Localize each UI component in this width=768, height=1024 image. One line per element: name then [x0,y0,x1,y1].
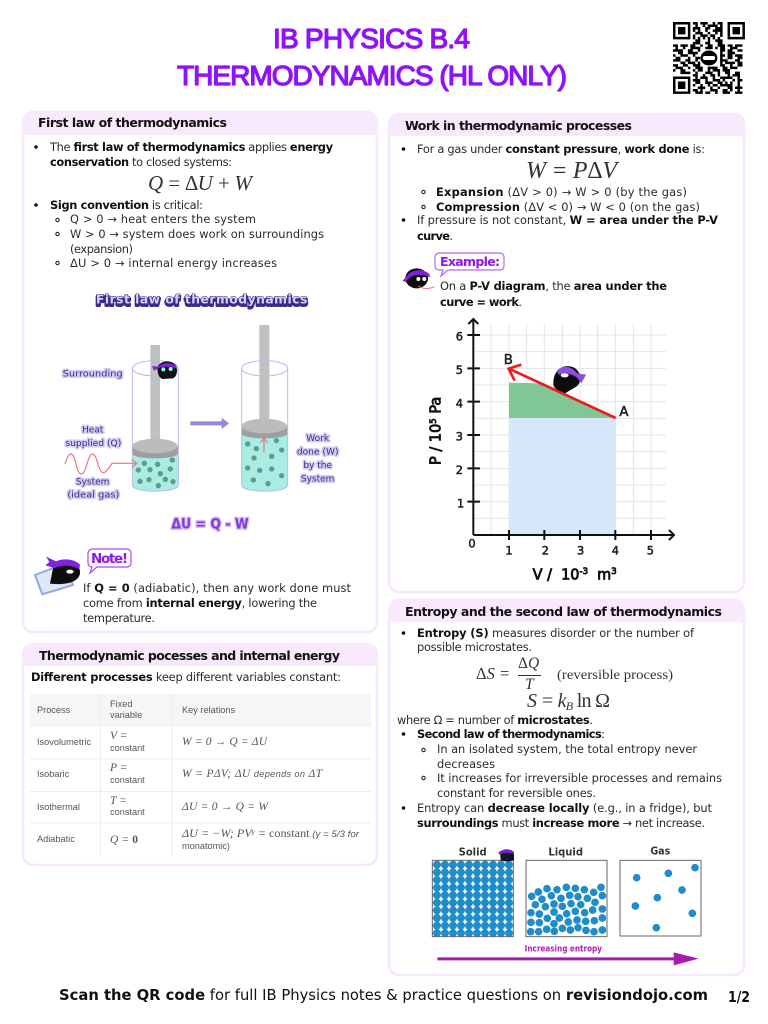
table: processes: Key relations [182,705,236,715]
text block: second law: constant for reversible ones. [437,786,596,800]
text block: first law definition: conservation to closed systems: [50,155,232,169]
row: isovolumetric: W = 0 → Q = ΔU [182,736,268,748]
text block: sign convention: ΔU > 0 → internal energy increases [70,256,277,270]
equation: entropy change: ΔS = [476,664,510,683]
row: isothermal [37,795,269,817]
x axis numbers: 3 [577,544,584,558]
label: surrounding: Surrounding [63,370,123,380]
text block: second law: where Ω = number of microstates. [397,713,593,727]
row: isovolumetric: Isovolumetric [37,737,92,747]
label: system: System [76,477,109,487]
panel heading: work [388,114,745,136]
icon: ninja with tablet [35,557,80,594]
panel heading: work: Work in thermodynamic processes [405,118,632,133]
title [177,23,567,91]
text block: second law: In an isolated system, the total entropy never [437,742,697,756]
text block: different processes: Different processes keep different variables constant: [31,670,341,684]
row: adiabatic: Q = 0 [110,834,138,846]
equation: Boltzmann entropy: S = k [527,690,567,712]
liquid box: Liquid [548,845,583,858]
x axis numbers [505,544,654,558]
row: isothermal: T = [110,795,127,807]
row: adiabatic: = [255,828,269,840]
panel: thermodynamic processes [22,644,378,865]
y axis numbers [456,330,476,551]
equation: entropy change: T [525,676,535,693]
point labels: A [619,405,629,420]
label: increasing entropy: Increasing entropy [525,945,602,955]
table: processes [30,694,371,855]
point labels: B [504,353,513,368]
x axis label: m [588,566,611,583]
text block: example: curve = work. [440,295,522,309]
text block: note: If Q = 0 (adiabatic), then any work done must [83,581,352,595]
row: adiabatic: ΔU = −W; PV [182,828,248,840]
row: adiabatic: constant (γ = 5/3 for [269,828,356,840]
table: processes: Fixed [110,699,132,709]
callout: note tag [88,549,131,573]
title: IB PHYSICS B.4 [273,23,470,54]
row: isobaric [37,762,324,785]
icon: ninja mascot on cylinder [152,361,177,379]
table: processes: variable [110,710,142,720]
text block: constant pressure: For a gas under constant pressure, work done is: [417,142,705,156]
x axis numbers: 1 [505,544,513,558]
row: isovolumetric [37,730,268,753]
label: work done [297,434,338,485]
icon: ninja on box [498,849,514,861]
arrow: increasing entropy [437,952,699,965]
y axis numbers: 2 [456,463,463,477]
line: A to B arrow [509,365,616,418]
icon: QR code [673,23,744,93]
right cylinder [242,325,288,491]
y axis numbers: 4 [456,396,463,410]
text block: second law: decreases [437,757,495,771]
callout: example tag: Example: [440,254,500,269]
callout: note tag: Note! [91,551,128,567]
row: adiabatic: monatomic) [182,841,230,851]
text block: expansion and compression: curve. [417,229,453,243]
text block: second law: Second law of thermodynamics: [417,727,605,741]
label: heat supplied [65,426,121,449]
table: processes: Process [37,705,71,715]
icon: ninja example [403,268,434,289]
area: triangle under curve [509,383,616,418]
label: work done: System [301,475,334,485]
text block: entropy definition [402,626,695,654]
equation: entropy change: (reversible process) [557,668,673,683]
axes [467,319,674,540]
text block: sign convention [34,198,324,270]
panel heading: entropy: Entropy and the second law of thermodynamics [405,604,722,619]
row: adiabatic: Adiabatic [37,834,75,844]
x axis label: 3 [611,567,617,577]
text block: expansion and compression: If pressure is not constant, W = area under the P-V [417,213,718,227]
equation: entropy change: ΔQ [518,655,539,672]
label: heat supplied: Heat [82,426,104,436]
text block: second law [397,713,722,830]
text block: sign convention: Q > 0 → heat enters the system [70,212,256,226]
y axis numbers: 6 [456,330,463,344]
row: isothermal: Isothermal [37,802,80,812]
text block: expansion and compression: Expansion (ΔV > 0) → W > 0 (by the gas) [436,185,687,199]
row: isovolumetric: V = [110,730,127,742]
panel: first law of thermodynamics [22,112,378,632]
text block: entropy definition: Entropy (S) measures disorder or the number of [417,626,695,640]
icon: ninja on slope [553,366,586,393]
label: system [67,477,119,500]
arrow: heat wave [65,454,137,474]
equation: Boltzmann entropy: B [566,699,574,713]
page number: 1/2 [728,988,750,1006]
solid box [432,845,513,937]
y axis numbers: 0 [468,537,476,551]
diagram: states of matter [432,845,701,965]
title: THERMODYNAMICS (HL ONLY) [177,60,567,91]
panel: entropy and second law [388,600,745,975]
diagram title: First law of thermodynamics [96,292,307,306]
diagram: first law piston [63,292,338,533]
text block: sign convention: (expansion) [70,242,133,256]
row: isobaric: Isobaric [37,769,70,779]
y axis label: P / 10 [428,423,445,465]
gas box [620,845,701,936]
row: adiabatic: γ [252,828,255,836]
text block: first law definition: The first law of thermodynamics applies energy [49,140,334,154]
x axis label: V / 10 [533,566,580,583]
panel heading: entropy [388,600,745,622]
x axis numbers: 4 [612,544,619,558]
panel: work in thermodynamic processes [388,114,745,592]
footer: scan text: Scan the QR code for full IB Physics notes & practice questions on revisiondojo.com [59,986,708,1004]
equation label: delta U: ΔU = Q - W [171,517,249,533]
panel heading: processes [22,644,378,666]
liquid box [526,845,607,937]
label: work done: Work [306,434,330,444]
chart: P-V diagram [428,319,674,583]
y axis label: 5 [429,418,439,424]
label: work done: by the [303,461,332,471]
grid [473,325,666,535]
x axis numbers: 5 [647,544,654,558]
y axis numbers: 5 [456,363,463,377]
x axis numbers: 2 [542,544,549,558]
text block: note [83,581,352,625]
solid box: Solid [459,845,487,858]
text block: note: temperature. [83,611,155,625]
y axis numbers: 1 [457,496,464,510]
label: system: (ideal gas) [67,490,119,500]
equation: Boltzmann entropy: ln Ω [572,690,610,712]
arrow: process direction [190,418,229,429]
text block: sign convention: W > 0 → system does work on surroundings [70,227,324,241]
row: adiabatic [37,828,360,851]
text block: example: On a P-V diagram, the area under the [440,279,667,293]
callout: example tag [435,253,504,276]
text block: sign convention: Sign convention is critical: [50,198,203,212]
gas box: Gas [650,845,670,858]
point labels [504,353,629,420]
row: isovolumetric: constant [110,743,145,753]
equation: first law: Q = ΔU + W [148,171,254,195]
label: work done: done (W) [297,447,338,457]
panel heading: processes: Thermodynamic pocesses and internal energy [39,648,340,663]
y axis numbers: 3 [456,430,463,444]
row: isothermal: ΔU = 0 → Q = W [181,801,269,813]
left cylinder [132,345,178,491]
panel heading: first law [22,112,378,135]
x axis label: -3 [580,567,588,577]
text block: example [440,279,667,309]
y axis label: Pa [428,397,445,418]
equation: entropy change [476,655,673,693]
text block: note: come from internal energy, lowering the [83,596,317,610]
area: rectangle under curve [509,418,616,535]
text block: second law: surroundings must increase more → net increase. [417,816,705,830]
diagram title: First law of thermodynamics [96,294,307,308]
row: isobaric: constant [110,775,145,785]
text block: second law: Entropy can decrease locally (e.g., in a fridge), but [417,801,713,815]
row: isobaric: P = [109,762,127,774]
equation: work: W = PΔV [526,158,619,184]
text block: second law: It increases for irreversible processes and remains [437,771,722,785]
text block: expansion and compression [402,185,718,243]
text block: first law definition [34,140,334,169]
panel heading: first law: First law of thermodynamics [38,115,227,130]
row: isobaric: W = PΔV; ΔU depends on ΔT [182,768,324,780]
row: isothermal: constant [110,807,145,817]
text block: entropy definition: possible microstates. [417,640,532,654]
label: heat supplied: supplied (Q) [65,439,121,449]
text block: expansion and compression: Compression (ΔV < 0) → W < 0 (on the gas) [436,200,700,214]
